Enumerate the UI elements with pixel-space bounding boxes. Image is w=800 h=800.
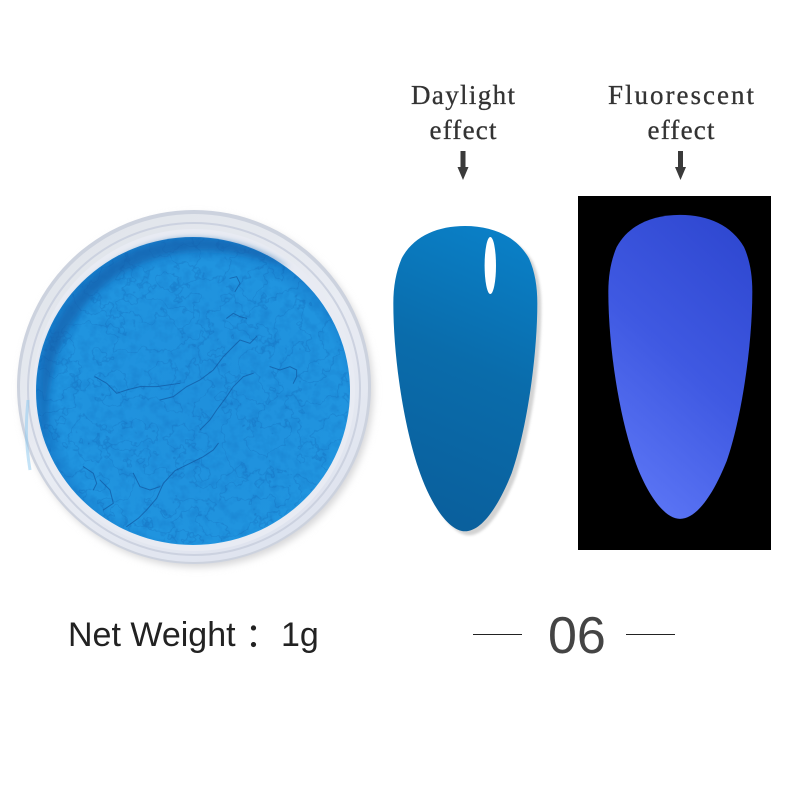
nail shadow (397, 230, 541, 535)
arrow: daylight (458, 151, 468, 180)
jar rim blue smear (26, 400, 30, 470)
net weight label: Net Weight (68, 616, 236, 654)
net weight label: 1g (281, 616, 319, 654)
nail highlight (485, 237, 496, 294)
panel: daylight nail (393, 226, 541, 535)
shade number: 06 (548, 607, 606, 665)
nail shape (393, 226, 537, 531)
infographic canvas (17, 84, 771, 654)
glowing nail (608, 215, 752, 519)
powder top shadow (41, 238, 290, 450)
panel: powder jar (17, 210, 373, 567)
heading: fluorescent effect: effect (648, 115, 715, 145)
panel: fluorescent nail on black (578, 196, 771, 550)
powder cracks (83, 277, 297, 527)
heading: fluorescent effect: Fluorescent (608, 80, 754, 110)
heading: fluorescent effect (608, 80, 754, 145)
heading: daylight effect (411, 80, 515, 145)
arrow: fluorescent (675, 151, 686, 180)
jar rim (17, 210, 371, 564)
net weight label: ： (245, 617, 279, 655)
heading: daylight effect: Daylight (411, 80, 515, 110)
black background (578, 196, 771, 550)
jar shadow (21, 215, 373, 567)
heading: daylight effect: effect (430, 115, 497, 145)
powder surface (36, 237, 351, 547)
